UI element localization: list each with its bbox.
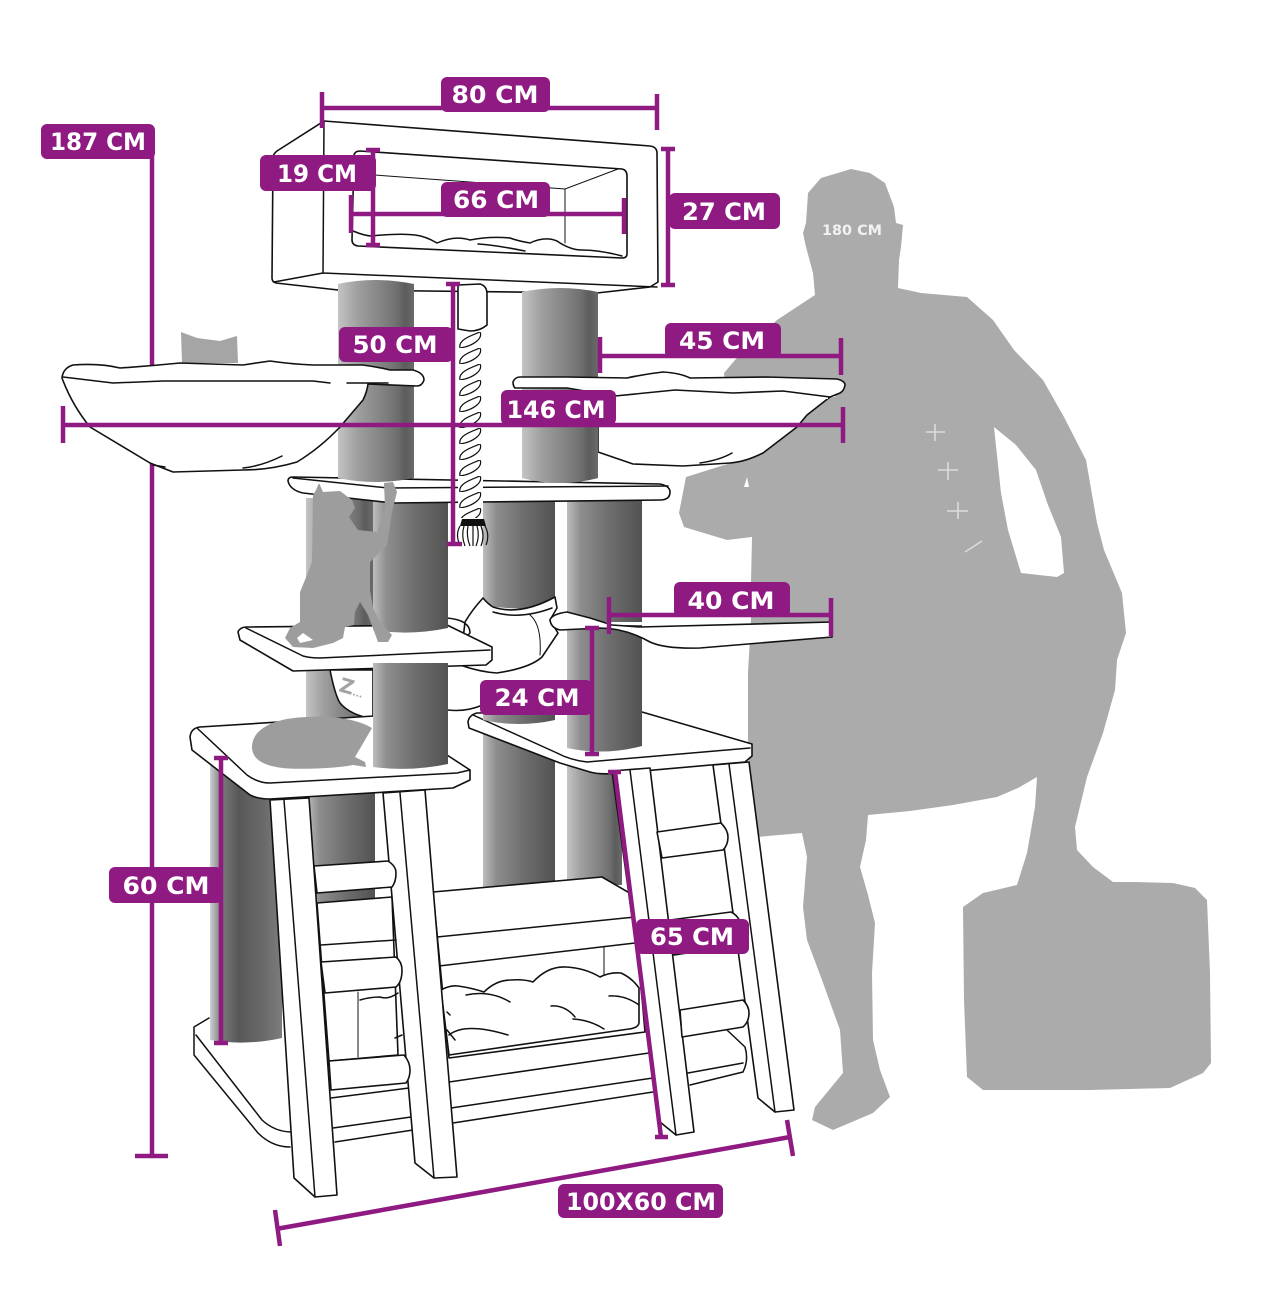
dimension: 65 CM: 65 CM xyxy=(650,923,734,951)
dimension: 27 CM xyxy=(661,149,780,285)
leg: centre right xyxy=(612,768,694,1135)
dimension: 50 CM: 50 CM xyxy=(352,331,438,359)
left rest hammock under shelf xyxy=(330,670,373,719)
dimension: 60 CM: 60 CM xyxy=(122,872,210,900)
dimension: 100X60 CM: 100X60 CM xyxy=(566,1188,716,1216)
dimension: 187 CM label: 187 CM xyxy=(50,128,146,156)
dimension: 45 CM xyxy=(600,323,841,375)
top box bed xyxy=(272,121,658,293)
shelf: sleeping cat platform xyxy=(190,716,470,799)
dimension: 19 CM xyxy=(260,150,380,245)
dimension: 40 CM: 40 CM xyxy=(688,587,774,615)
lower rear sisal posts xyxy=(307,730,622,905)
dimension: 40 CM xyxy=(609,582,831,636)
dimension: 27 CM: 27 CM xyxy=(682,198,766,226)
leg: front left xyxy=(270,798,337,1197)
text: sleeping Z: Z... xyxy=(337,673,367,703)
upper shelf xyxy=(288,477,670,503)
left back panel xyxy=(317,897,398,1061)
mid rear posts xyxy=(306,498,642,728)
cushion xyxy=(441,967,639,1055)
post: bottom left tall sisal post xyxy=(210,755,282,1043)
ladder rungs xyxy=(314,823,749,1090)
icon: cat standing and scratching post xyxy=(285,482,397,648)
shelf: lower right platform xyxy=(468,712,752,774)
side shelf with 40 cm edge xyxy=(550,612,832,648)
posts standing on lower right platform xyxy=(483,625,642,752)
shelf: cat level platform xyxy=(238,625,492,671)
dimension: 66 CM: 66 CM xyxy=(453,186,539,214)
upper sisal posts xyxy=(338,280,598,483)
icon: cat peeking over left hammock xyxy=(181,332,238,363)
post: cat scratching post xyxy=(373,500,448,633)
right hammock xyxy=(513,372,845,483)
dimension: 45 CM: 45 CM xyxy=(679,327,765,355)
sisal rope with cap and tassel xyxy=(458,284,488,546)
dimension: 19 CM: 19 CM xyxy=(277,160,357,188)
icon: sleeping cat xyxy=(252,717,372,769)
label: 180 CM: 180 CM xyxy=(822,223,882,239)
dimensions xyxy=(41,77,843,1246)
dimension: 24 CM xyxy=(480,628,599,755)
dimension: 50 CM xyxy=(339,284,462,545)
person silhouette, 180 cm, foot on pouf xyxy=(679,169,1211,1130)
dimension: 24 CM: 24 CM xyxy=(494,684,580,712)
dimension: 65 CM xyxy=(608,772,749,1137)
front legs xyxy=(270,762,794,1197)
dimension: 80 CM: 80 CM xyxy=(452,81,538,109)
leg: right xyxy=(713,762,794,1112)
dimension: 146 CM: 146 CM xyxy=(506,396,606,424)
left hammock xyxy=(62,361,424,472)
base platform xyxy=(194,1018,747,1147)
post: lower central post xyxy=(373,663,448,769)
dimension: 100X60 CM xyxy=(275,1120,793,1246)
dimension: total height line xyxy=(135,150,168,1156)
leg: centre left xyxy=(383,790,457,1178)
dimension: 66 CM xyxy=(351,182,624,234)
tunnel hammock between posts xyxy=(447,597,558,710)
bed box xyxy=(317,877,645,1061)
dimension: 80 CM xyxy=(322,77,657,130)
window opening xyxy=(352,151,627,258)
dimension: 60 CM xyxy=(109,758,228,1043)
dimension: 146 CM xyxy=(63,390,843,443)
